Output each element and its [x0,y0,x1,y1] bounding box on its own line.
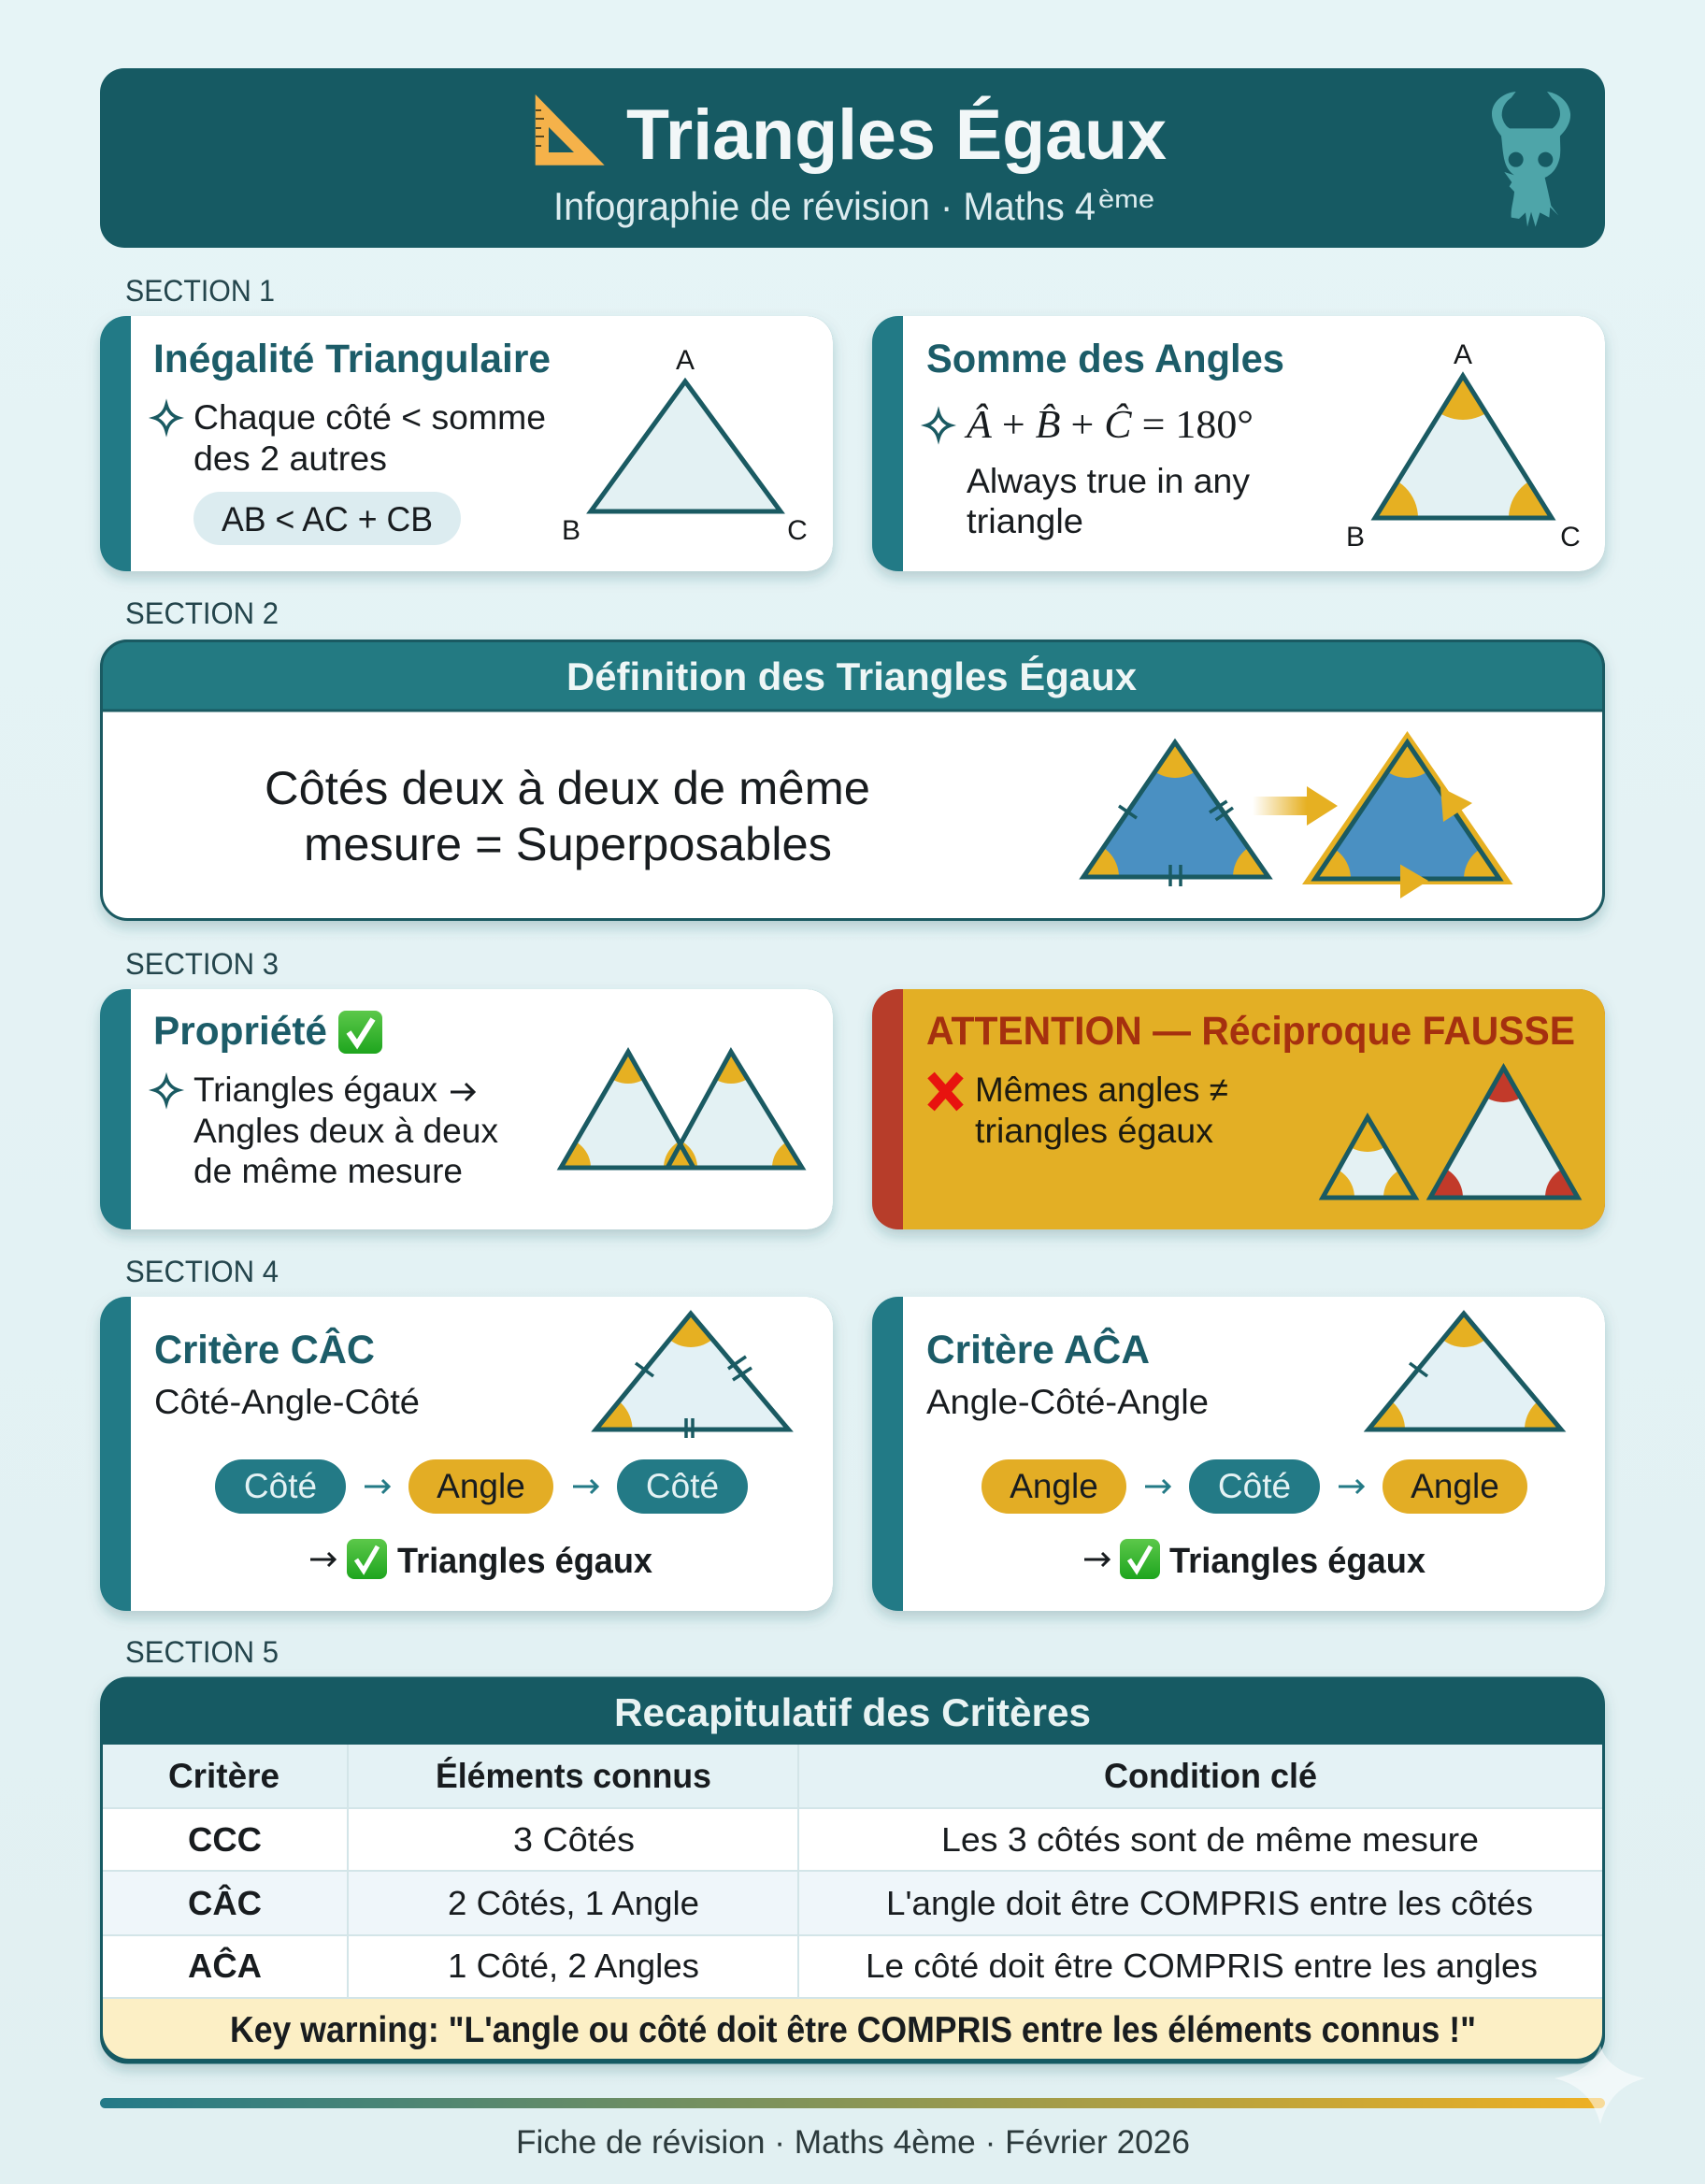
text: rule: Chaque côté < somme [193,398,546,437]
large triangle [1426,1063,1582,1200]
formula pill [193,492,461,545]
triangle with angles: B [1346,522,1365,553]
triangle [591,1310,794,1438]
result [310,1539,652,1581]
panel: summary table [101,1678,1604,2062]
result: Triangles égaux [397,1542,652,1581]
heading: Définition des Triangles Égaux [566,654,1138,698]
row AĈA: AĈA [188,1946,262,1985]
text: note: Always true in any [967,462,1251,500]
footer: Fiche de révision · Maths 4ème · Février 2026 [516,2124,1190,2161]
sequence pills: Angle [1411,1467,1499,1505]
text: property: de même mesure [193,1152,463,1190]
icon: diamond bullet [926,412,951,438]
subtitle: ème [1098,185,1154,213]
row CÂC: L'angle doit être COMPRIS entre les côtés [886,1884,1533,1922]
triangle with angles: A [1454,339,1472,370]
triangle ABC [562,345,808,546]
heading: Critère AĈA [926,1327,1150,1372]
table header row: Éléments connus [436,1757,711,1795]
icon: red cross [931,1075,960,1108]
section label 2: SECTION 2 [125,596,279,630]
panel: Critère AĈA [872,1280,1605,1611]
triangle with angles [1348,344,1580,546]
icon: set square [536,94,605,165]
arrow [1253,786,1338,826]
panel: Définition [101,641,1604,920]
icon: diamond bullet [154,405,179,431]
panel: Propriété [100,989,833,1229]
row CCC: 3 Côtés [513,1820,635,1859]
table header row: Critère [168,1757,279,1795]
text: note [967,462,1251,540]
panel: Critère CÂC [100,1280,833,1611]
definition text: mesure = Superposables [304,818,832,870]
row CÂC: CÂC [188,1883,262,1922]
definition text [265,762,870,870]
heading: Inégalité Triangulaire [153,337,551,381]
heading: Propriété [153,1009,327,1054]
heading: Critère CÂC [154,1327,375,1372]
icon: check [338,1011,382,1054]
panel: Attention [872,989,1611,1230]
definition text: Côtés deux à deux de même [265,762,870,814]
sequence pills: Côté [1218,1467,1291,1505]
gradient divider bar [100,2098,1605,2108]
sequence pills: Angle [1010,1467,1098,1505]
result [1084,1539,1426,1581]
triangle with tick marks [1079,739,1273,886]
heading: Somme des Angles [926,337,1284,381]
triangle ABC: C [787,515,808,546]
text: note: triangle [967,502,1083,540]
small triangle [1318,1113,1419,1200]
panel: Somme des Angles [872,316,1605,571]
row AĈA: 1 Côté, 2 Angles [448,1947,699,1985]
triangle ABC: B [562,515,580,546]
superposed triangle [1302,731,1512,898]
section label 3: SECTION 3 [125,947,279,981]
result: Triangles égaux [1169,1542,1426,1581]
row CCC: CCC [188,1820,262,1859]
text: warning: triangles égaux [975,1112,1213,1150]
formula: Â + B̂ + Ĉ = 180° [964,403,1254,447]
triangle with angles: C [1560,522,1581,553]
row CCC: Les 3 côtés sont de même mesure [941,1820,1479,1859]
two triangles [557,1047,806,1171]
sequence pills [215,1459,748,1514]
icon: diamond bullet [154,1078,179,1103]
key warning [103,1999,1602,2059]
title banner [100,68,1605,248]
row AĈA [103,1934,1602,1999]
icon: hollow knight mascot [1492,92,1570,227]
sparkle [1555,2046,1645,2124]
text: property: Triangles égaux [193,1070,437,1109]
text: warning: Mêmes angles ≠ [975,1070,1228,1109]
triangle ABC: A [676,345,695,376]
subtitle: Infographie de révision · Maths 4 [553,184,1096,228]
title: Triangles Égaux [626,95,1167,175]
subheading: Côté-Angle-Côté [154,1383,420,1421]
section label 5: SECTION 5 [125,1635,279,1669]
sequence pills [981,1459,1527,1514]
text: warning [975,1070,1228,1150]
text: property [193,1070,499,1190]
table heading: Recapitulatif des Critères [614,1690,1091,1734]
section label 4: SECTION 4 [125,1255,279,1288]
key warning: Key warning: "L'angle ou côté doit être COMPRIS entre les éléments connus !" [230,2010,1476,2050]
panel: Inégalité Triangulaire [100,316,833,571]
section label 1: SECTION 1 [125,274,275,308]
row CÂC: 2 Côtés, 1 Angle [448,1884,699,1922]
text: rule: des 2 autres [193,439,387,478]
triangle [1363,1310,1567,1432]
row AĈA: Le côté doit être COMPRIS entre les angles [866,1947,1538,1985]
row CÂC [103,1870,1602,1934]
table header row [103,1745,1602,1807]
sequence pills: Côté [244,1467,317,1505]
sequence pills: Angle [437,1467,525,1505]
row CCC [103,1807,1602,1870]
text: property: Angles deux à deux [193,1112,499,1150]
subheading: Angle-Côté-Angle [926,1383,1209,1421]
text: rule [193,398,546,478]
sequence pills: Côté [646,1467,719,1505]
heading: ATTENTION — Réciproque FAUSSE [926,1009,1575,1054]
table header row: Condition clé [1104,1757,1317,1795]
formula pill: AB < AC + CB [222,500,433,539]
